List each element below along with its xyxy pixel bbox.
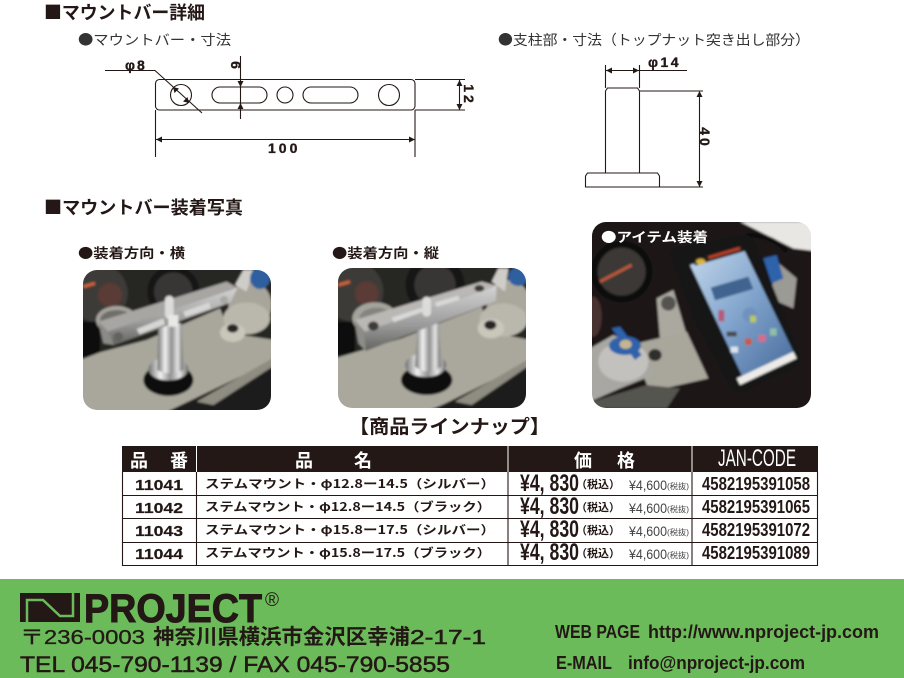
label: phi 14: φ14 — [648, 54, 681, 70]
table row 11044: ¥4, 830 — [520, 539, 579, 566]
table row 11042: 4582195391065 — [702, 497, 810, 517]
subheading: mount bar dimensions: ●マウントバー・寸法 — [78, 30, 231, 50]
table row 11042: （税込） — [576, 499, 620, 515]
table row 11041: ステムマウント・φ12.8ー14.5（シルバー） — [205, 475, 495, 492]
table row 11044: ステムマウント・φ15.8ー17.5（ブラック） — [205, 544, 491, 561]
address — [20, 621, 486, 651]
label: 100: 100 — [268, 140, 300, 156]
caption: horizontal mounting: ●装着方向・横 — [78, 242, 186, 262]
label: 40: 40 — [697, 127, 713, 149]
label: 12: 12 — [461, 84, 477, 106]
photo: phone mounted on bike — [592, 222, 811, 408]
address: 2-17-1 — [410, 627, 486, 649]
table row 11041: 4582195391058 — [702, 474, 810, 494]
label: 6: 6 — [228, 61, 244, 69]
icon: N mark — [20, 593, 80, 622]
table header row: 品 — [295, 447, 313, 473]
table row 11044 — [135, 539, 810, 566]
table row 11043: 11043 — [135, 523, 183, 540]
table row 11043: ステムマウント・φ15.8ー17.5（シルバー） — [205, 521, 495, 538]
table header row: 名 — [354, 447, 372, 473]
table header row: 番 — [170, 447, 188, 473]
table row 11042: 11042 — [135, 500, 183, 517]
photo: horizontal mount bar — [83, 270, 271, 410]
table row 11041 — [135, 470, 810, 497]
logo: N PROJECT: PROJECT — [84, 587, 262, 631]
caption: item mounted: ●アイテム装着 — [601, 226, 708, 246]
table row 11044: 11044 — [135, 546, 184, 563]
email address: info@nproject-jp.com — [628, 653, 805, 673]
table row 11043: ¥4, 830 — [520, 516, 579, 543]
email address — [556, 653, 805, 673]
table header row — [122, 445, 818, 473]
table header row: 品 — [130, 447, 148, 473]
registered mark: ® — [265, 590, 279, 611]
table row 11042: (税抜) — [667, 504, 689, 514]
table header row: 格 — [617, 447, 635, 473]
table row 11043 — [135, 516, 810, 543]
table row 11042: ¥4, 830 — [520, 493, 579, 520]
table row 11041: ¥4,600 — [628, 477, 667, 493]
web page address: http://www.nproject-jp.com — [648, 622, 879, 642]
table row 11042: ¥4,600 — [628, 500, 667, 516]
footer band — [0, 579, 904, 678]
table row 11041: 11041 — [135, 477, 183, 494]
heading: mounting photos: ■マウントバー装着写真 — [44, 194, 243, 220]
table row 11044: （税込） — [576, 545, 620, 561]
web page address: WEB PAGE — [555, 622, 640, 642]
address: 〒236-0003 — [20, 627, 145, 649]
table row 11043: 4582195391072 — [702, 520, 810, 540]
diagram: post technical drawing — [586, 54, 713, 187]
photo: vertical mount bar — [338, 268, 526, 408]
table row 11043: ¥4,600 — [628, 523, 667, 539]
table row 11043: （税込） — [576, 522, 620, 538]
table header row: JAN-CODE — [718, 445, 796, 472]
table row 11042 — [135, 493, 810, 520]
table row 11044: 4582195391089 — [702, 543, 810, 563]
email address: E-MAIL — [556, 653, 612, 673]
diagram: mount bar technical drawing — [105, 56, 477, 157]
table row 11043: (税抜) — [667, 527, 689, 537]
address: 神奈川県横浜市金沢区幸浦 — [153, 621, 410, 651]
table row 11041: （税込） — [576, 476, 620, 492]
phone and fax: TEL 045-790-1139 / FAX 045-790-5855 — [20, 652, 450, 677]
table row 11041: (税抜) — [667, 481, 689, 491]
subheading: post dimensions: ●支柱部・寸法（トップナット突き出し部分） — [498, 30, 810, 50]
table row 11041: ¥4, 830 — [520, 470, 579, 497]
table: product lineup — [122, 445, 818, 566]
label: phi 8: φ8 — [125, 57, 147, 73]
table row 11042: ステムマウント・φ12.8ー14.5（ブラック） — [205, 498, 491, 515]
caption: vertical mounting: ●装着方向・縦 — [332, 242, 440, 262]
heading: product lineup: 【商品ラインナップ】 — [349, 412, 550, 439]
table row 11044: ¥4,600 — [628, 546, 667, 562]
table row 11044: (税抜) — [667, 550, 689, 560]
table header row: 価 — [574, 447, 592, 473]
